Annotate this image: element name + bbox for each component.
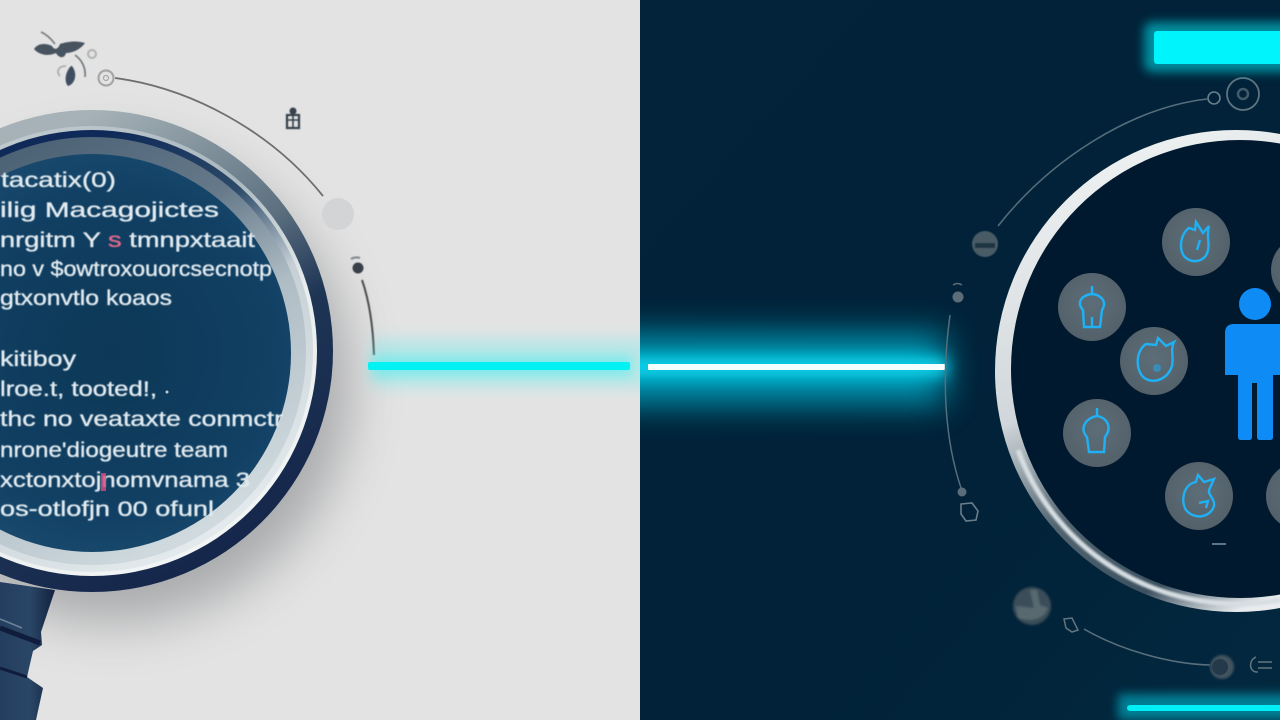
lens text block: os-otlofjn 00 ofunl — [0, 498, 214, 521]
icon: floral ornament — [34, 32, 96, 86]
lens outer rim — [0, 110, 333, 592]
arc connector: top right — [998, 78, 1259, 226]
lens drop shadow — [0, 147, 350, 623]
magnifier handle — [0, 582, 55, 720]
icon badge: lower left — [1063, 399, 1131, 467]
panel: dark right half — [640, 0, 1280, 720]
glowing bar: top — [1144, 22, 1280, 72]
icon badge: bottom — [1165, 462, 1233, 530]
lens text block: lroe.t, tooted!, — [0, 378, 157, 401]
icon badge: centre — [1120, 327, 1188, 395]
lens text block: no v $owtroxouorcsecnotp — [0, 258, 272, 281]
lens glass — [0, 154, 291, 552]
icon: small glyph — [287, 108, 299, 128]
lens text block: ilig Macagojictes — [0, 199, 219, 222]
lens text block — [0, 169, 283, 521]
glowing bar: bottom — [1118, 694, 1280, 720]
lens text block: xctonxtojnomvnama 3 — [0, 469, 250, 492]
arc connector: top left — [98, 70, 323, 196]
icon badge: right edge bottom — [1266, 462, 1280, 530]
lens text block: nrone'diogeutre team — [0, 439, 228, 462]
lens text block: nrgitm Y s tmnpxtaait — [0, 229, 255, 252]
node: pie icon — [1013, 587, 1051, 625]
node: dark planet icon — [972, 231, 998, 257]
icon badge: top — [1162, 208, 1230, 276]
panel: light left half — [0, 0, 640, 720]
node: grey dot — [322, 198, 354, 230]
lens text block: thc no veataxte conmctr — [0, 408, 283, 431]
connector: glowing white beam right — [600, 335, 947, 403]
magnifying glass — [0, 110, 333, 720]
lens text block: kitiboy — [0, 348, 77, 371]
arc connector: left of circle — [945, 284, 978, 521]
small dash — [1212, 543, 1226, 545]
lens text block: tacatix(0) — [1, 169, 116, 192]
arc connector: lower left — [351, 257, 374, 355]
lens text block: gtxonvtlo koaos — [0, 287, 172, 310]
icon: person — [1225, 288, 1280, 440]
icon badge: upper left — [1058, 273, 1126, 341]
person circle frame — [995, 130, 1280, 612]
connector: cyan beam left — [368, 338, 662, 388]
icon badge: right edge top — [1271, 236, 1280, 304]
arc connector: bottom right — [1064, 618, 1272, 679]
lens silver ring — [0, 126, 317, 576]
